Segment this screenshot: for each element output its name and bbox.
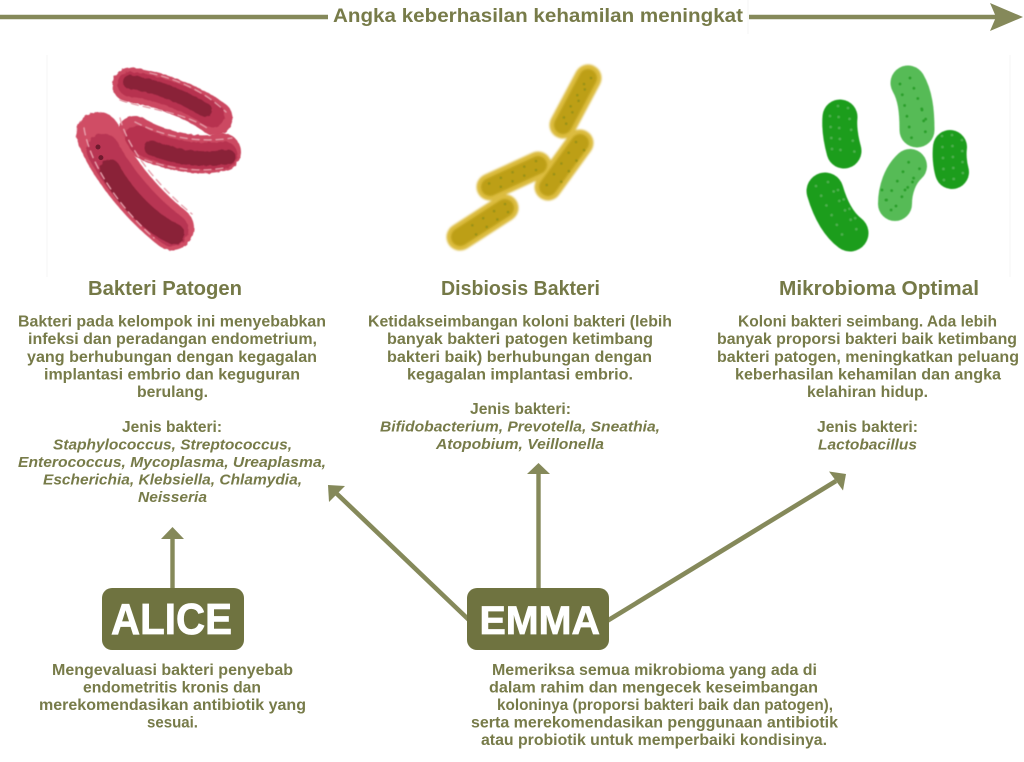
description: Ketidakseimbangan koloni bakteri (lebih bbox=[368, 314, 672, 330]
heading: Mikrobioma Optimal bbox=[779, 278, 979, 300]
bacteria types: Lactobacillus bbox=[818, 436, 917, 454]
bacteria types: Neisseria bbox=[138, 489, 207, 506]
text: EMMA description: atau probiotik untuk memperbaiki kondisinya. bbox=[481, 732, 827, 749]
description bbox=[368, 314, 672, 384]
description bbox=[717, 314, 1019, 401]
description: berulang. bbox=[137, 384, 208, 401]
description: banyak proporsi bakteri baik ketimbang bbox=[717, 331, 1017, 348]
description: bakteri baik) berhubungan dengan bbox=[387, 349, 652, 366]
heading: Bakteri Patogen bbox=[88, 278, 242, 300]
panel: optimal microbiome bbox=[717, 278, 1019, 454]
description: kegagalan implantasi embrio. bbox=[407, 366, 633, 384]
bacteria types bbox=[18, 419, 326, 506]
text: ALICE description bbox=[39, 662, 306, 732]
text: ALICE description: Mengevaluasi bakteri penyebab bbox=[52, 662, 293, 679]
bacteria types: Bifidobacterium, Prevotella, Sneathia, bbox=[380, 418, 660, 436]
badge: EMMA bbox=[467, 588, 609, 650]
text: EMMA description: Memeriksa semua mikrobioma yang ada di bbox=[492, 662, 817, 679]
bacteria types bbox=[817, 419, 918, 454]
description: implantasi embrio dan keguguran bbox=[44, 366, 300, 384]
text: EMMA description bbox=[471, 662, 838, 749]
icon: green optimal microbiome bbox=[816, 78, 963, 240]
arrow: ALICE to pathogenic bacteria bbox=[161, 527, 184, 590]
icon: pathogenic red bacteria bbox=[84, 73, 232, 238]
description bbox=[18, 314, 326, 401]
description: Koloni bakteri seimbang. Ada lebih bbox=[738, 314, 997, 330]
bacteria types: Staphylococcus, Streptococcus, bbox=[53, 436, 292, 454]
bacteria types: Escherichia, Klebsiella, Chlamydia, bbox=[43, 472, 302, 488]
bacteria types: Jenis bakteri: bbox=[817, 419, 918, 436]
bacteria types bbox=[380, 401, 660, 453]
arrow: EMMA to optimal microbiome bbox=[607, 472, 846, 621]
text: EMMA description: dalam rahim dan mengecek keseimbangan bbox=[489, 680, 818, 697]
bacteria types: Enterococcus, Mycoplasma, Ureaplasma, bbox=[18, 454, 326, 471]
icon: yellow dysbiosis bacteria bbox=[460, 78, 591, 240]
badge: EMMA: EMMA bbox=[480, 599, 600, 643]
description: bakteri patogen, meningkatkan peluang bbox=[717, 349, 1019, 366]
arrow: EMMA to dysbiosis bbox=[527, 463, 550, 590]
text: EMMA description: koloninya (proporsi bakteri baik dan patogen), bbox=[497, 697, 833, 714]
bacteria types: Jenis bakteri: bbox=[122, 419, 222, 436]
bacteria types: Jenis bakteri: bbox=[470, 401, 571, 418]
title: Angka keberhasilan kehamilan meningkat bbox=[333, 5, 744, 27]
panel: bacterial dysbiosis bbox=[368, 278, 672, 453]
text: EMMA description: serta merekomendasikan penggunaan antibiotik bbox=[471, 715, 838, 732]
description: keberhasilan kehamilan dan angka bbox=[735, 366, 1001, 384]
description: yang berhubungan dengan kegagalan bbox=[27, 349, 317, 366]
text: ALICE description: merekomendasikan antibiotik yang bbox=[39, 697, 306, 714]
text: ALICE description: endometritis kronis dan bbox=[83, 680, 261, 697]
heading: Disbiosis Bakteri bbox=[441, 278, 600, 300]
description: banyak bakteri patogen ketimbang bbox=[387, 331, 653, 348]
arrow: EMMA to pathogenic bacteria bbox=[328, 485, 469, 620]
bacteria types: Atopobium, Veillonella bbox=[435, 436, 604, 453]
panel: pathogenic bacteria bbox=[18, 278, 326, 506]
badge: ALICE: ALICE bbox=[111, 595, 232, 644]
description: infeksi dan peradangan endometrium, bbox=[28, 331, 317, 348]
arrow: pregnancy success rate rising bbox=[0, 3, 1023, 31]
description: Bakteri pada kelompok ini menyebabkan bbox=[18, 314, 326, 330]
description: kelahiran hidup. bbox=[807, 384, 928, 401]
text: ALICE description: sesuai. bbox=[147, 715, 198, 732]
